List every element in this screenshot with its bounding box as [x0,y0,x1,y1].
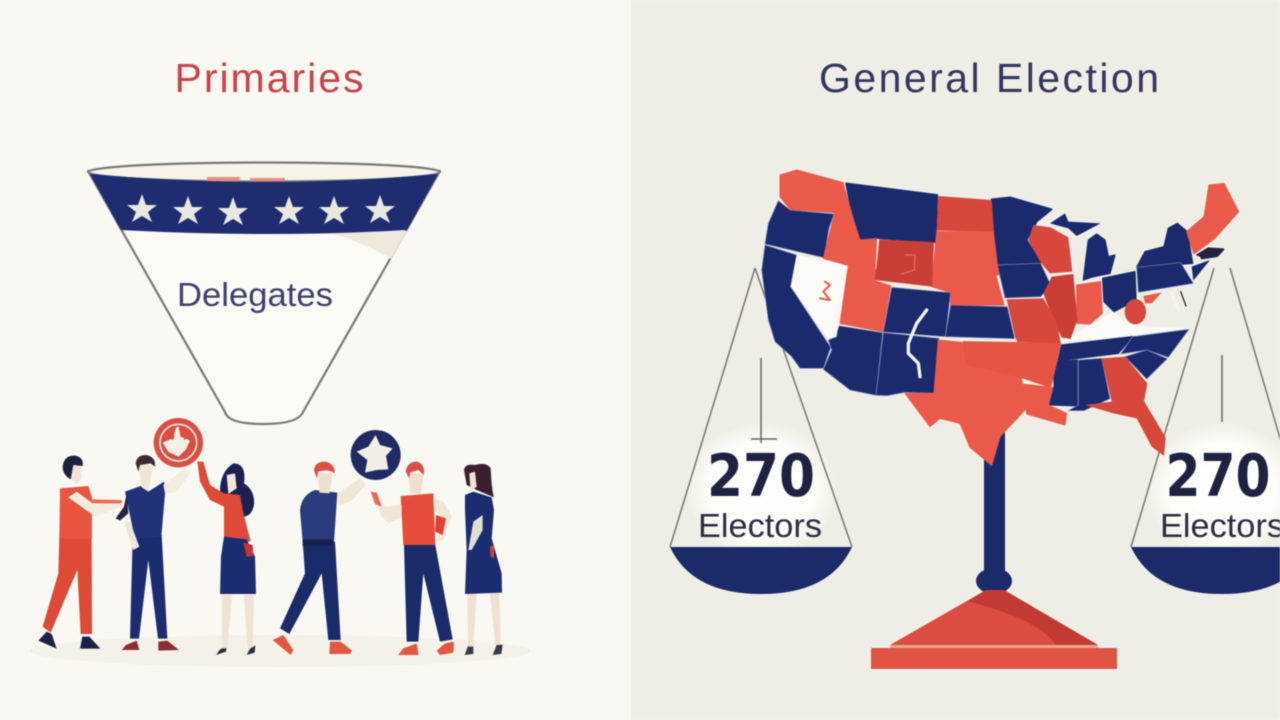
person 4 [273,462,366,655]
funnel [88,162,440,424]
Kentucky gap [1062,312,1187,342]
ground shadow [30,635,530,667]
person 3 [197,462,256,655]
navy states [762,183,1210,411]
red states [780,170,1239,465]
heading: Primaries: Primaries [174,55,364,101]
label: Electors: Electors [698,507,822,544]
scale base [871,590,1117,669]
map details [820,248,1223,377]
US electoral map [762,170,1239,465]
label: Delegates: Delegates [177,276,333,313]
label: Electors: Electors [1160,507,1280,544]
scale stand [976,432,1012,594]
person 1 [38,456,122,649]
person 6 [464,464,503,655]
panel: primaries [0,0,631,720]
stars [127,194,395,225]
people: right group [273,430,503,655]
darker red states [875,196,1166,456]
person 5 [371,462,454,655]
Nevada [791,255,848,338]
right scale pan [1131,268,1280,594]
heading: General Election: General Election [819,55,1159,101]
badge: navy [351,430,401,480]
left scale pan [670,268,852,594]
people: left group [38,418,256,655]
value: 270: 270 [707,441,815,510]
badge: red [154,418,203,467]
person 2 [116,455,190,651]
funnel band [90,174,438,234]
panel: general election [631,0,1280,720]
